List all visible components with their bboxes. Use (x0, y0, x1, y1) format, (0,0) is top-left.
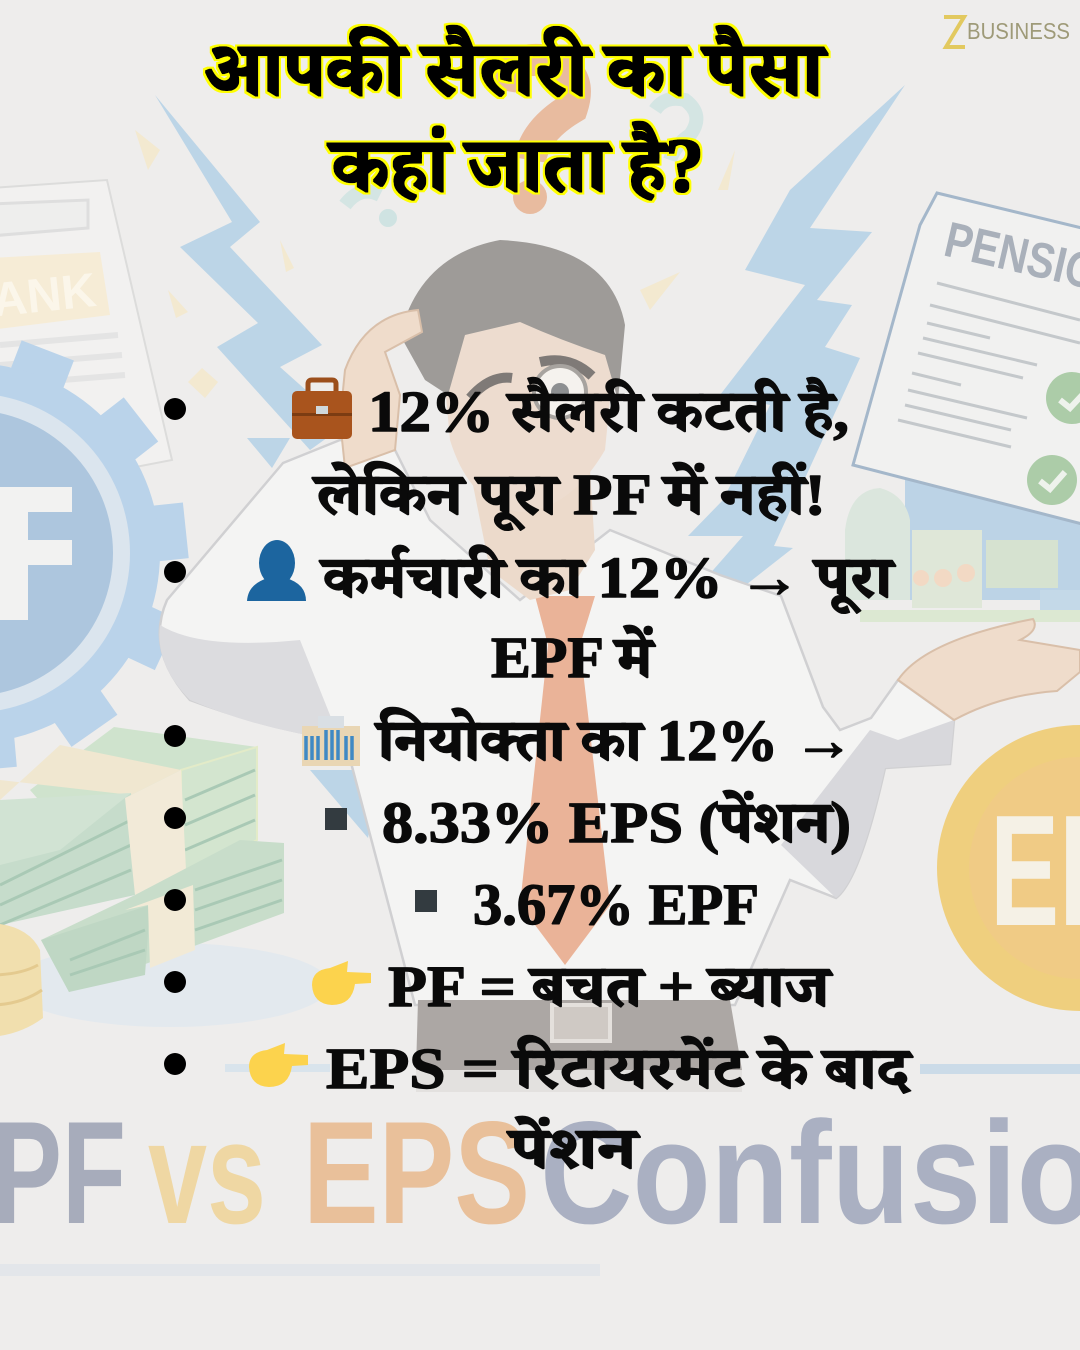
panel: pension document (853, 193, 1080, 526)
icon: pointing hand (249, 1043, 308, 1087)
shirt and sleeves (160, 440, 954, 1005)
icon: question marks (345, 60, 696, 227)
icon: sparkles (135, 130, 735, 398)
tie (520, 596, 610, 965)
title: आपकी सैलरी का पैसा (205, 24, 828, 112)
text: but not all in PF: लेकिन पूरा PF में नहीं! (312, 461, 826, 531)
icon: lightning bolts (155, 85, 905, 838)
heading: PF vs EPS Confusion: vs (148, 1091, 266, 1254)
lower stack (41, 840, 284, 992)
icon: briefcase (292, 380, 352, 439)
logo: Z Business (944, 17, 1070, 47)
hair (400, 240, 625, 400)
text: employee share: कर्मचारी का 12% → पूरा (319, 544, 896, 614)
title (205, 24, 828, 208)
bullet list (164, 378, 914, 1181)
icon: square (415, 890, 437, 912)
hand on head (340, 310, 422, 468)
panel: building behind document (845, 480, 1080, 622)
icon: square (325, 808, 347, 830)
face (440, 275, 615, 512)
eyebrows (470, 360, 592, 398)
title: कहां जाता है? (327, 120, 704, 208)
text: PF formula: PF = बचत + ब्याज (388, 954, 834, 1019)
money shadow (10, 943, 330, 1027)
text: employer share: नियोक्ता का 12% → (374, 708, 854, 773)
text: EPS formula: EPS = रिटायरमेंट के बाद (326, 1036, 914, 1101)
text: pension: पेंशन (506, 1116, 641, 1181)
icon: PF gear (0, 340, 189, 772)
text: EPS share: 8.33% EPS (पेंशन) (382, 790, 851, 855)
icon: EPS coin (937, 725, 1080, 1011)
heading: PF vs EPS Confusion: EPS (303, 1091, 530, 1254)
icon: office building (302, 716, 360, 766)
text: EPF share: 3.67% EPF (473, 872, 759, 937)
belt and trousers (416, 1000, 742, 1070)
list bullets (164, 398, 186, 1075)
icon: person (247, 540, 306, 601)
eye and glasses (534, 366, 586, 418)
text: in EPF: EPF में (491, 625, 656, 690)
panel: bank document (0, 180, 172, 470)
upper stack (30, 727, 257, 877)
heading: PF vs EPS Confusion (0, 1091, 1080, 1254)
icon: gold coin stack (0, 923, 43, 1037)
illustration: confused man (159, 240, 1080, 1092)
neck (470, 470, 595, 600)
sleeve shadows (159, 625, 340, 740)
hand (898, 619, 1080, 720)
icon: pointing hand (312, 961, 371, 1005)
logo: Z Business: BUSINESS (967, 18, 1070, 44)
panel: stacks of money (0, 727, 330, 1037)
text: 12% salary cut: 12% सैलरी कटती है, (368, 378, 849, 444)
